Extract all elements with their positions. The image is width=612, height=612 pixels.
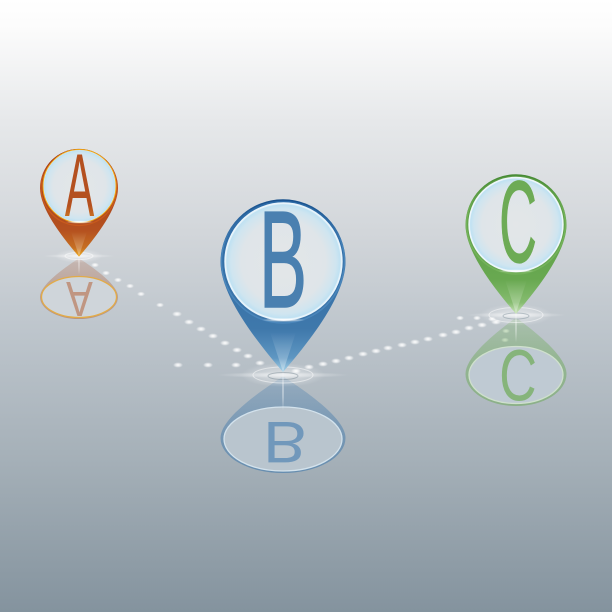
- reflected teardrop A: [40, 258, 118, 319]
- reflected teardrop C: [466, 318, 566, 406]
- reflected lens B: [224, 407, 342, 471]
- pin A: [40, 135, 118, 257]
- ground glow at pin A: [43, 249, 115, 276]
- tip highlight A: [71, 232, 87, 256]
- letter C: C: [499, 159, 537, 288]
- lens glint A: [66, 220, 94, 224]
- lens glint C: [498, 269, 534, 273]
- tip highlight B: [270, 332, 296, 372]
- teardrop body C: [466, 174, 566, 314]
- teardrop body B: [220, 200, 346, 372]
- letter B: B: [259, 183, 307, 337]
- tip highlight C: [505, 280, 527, 313]
- teardrop body A: [40, 149, 118, 257]
- rim A: [41, 150, 117, 226]
- reflected letter B: B: [263, 409, 307, 473]
- pin B: [220, 183, 346, 372]
- ground glow at pin B: [217, 363, 349, 412]
- letter A: A: [65, 135, 94, 235]
- dotted route lines: [91, 263, 510, 374]
- rim B: [222, 200, 344, 323]
- reflected letter C: C: [499, 334, 537, 414]
- lens glint B: [262, 318, 306, 322]
- reflected lens A: [42, 276, 116, 318]
- reflection of pin A: [40, 258, 118, 325]
- lens A: [43, 150, 116, 222]
- lens C: [469, 178, 563, 272]
- reflection of pin B: [220, 376, 346, 473]
- reflected teardrop B: [220, 376, 346, 473]
- ground glow at pin C: [466, 304, 566, 344]
- pin C: [466, 159, 566, 314]
- rim C: [466, 175, 566, 274]
- reflected lens C: [469, 346, 563, 404]
- reflection of pin C: [466, 318, 566, 414]
- reflected letter A: A: [66, 271, 93, 325]
- lens B: [225, 203, 342, 320]
